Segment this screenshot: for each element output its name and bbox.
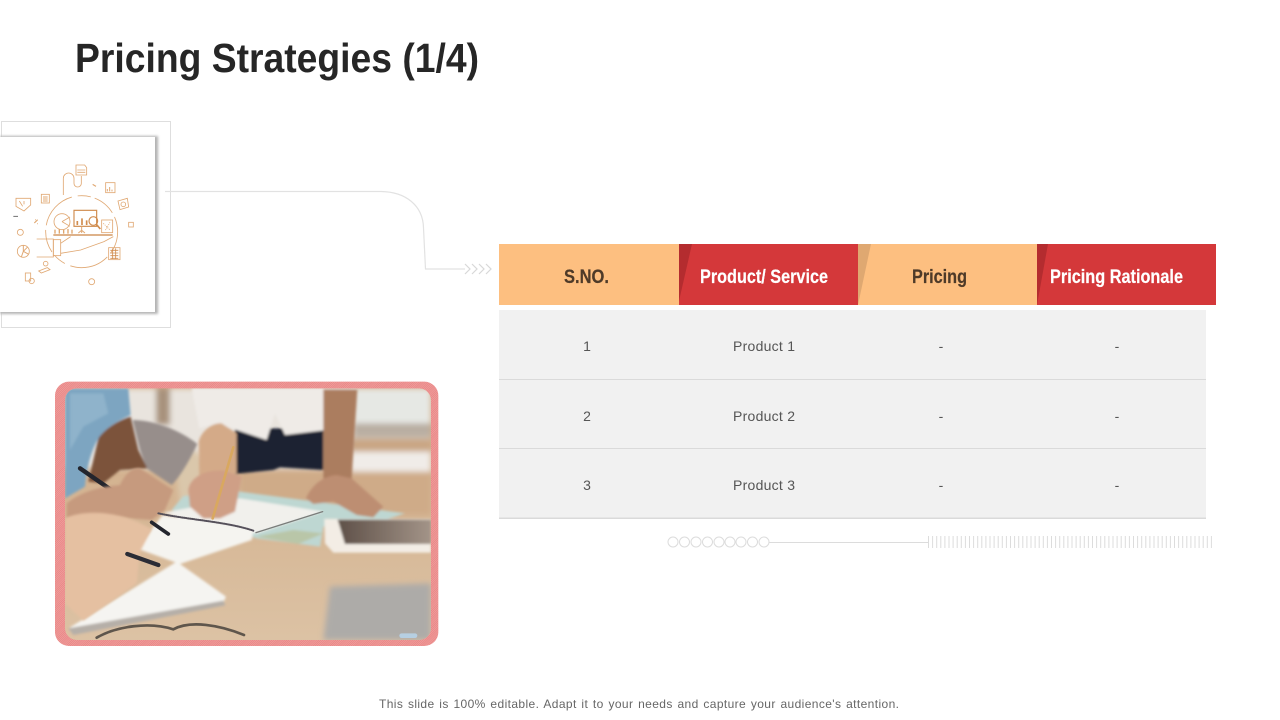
chair xyxy=(133,420,197,485)
row 1: - xyxy=(1115,338,1120,354)
row 3: - xyxy=(1115,477,1120,493)
right hand xyxy=(306,475,383,517)
header: S.NO. xyxy=(499,244,679,305)
card outer frame xyxy=(2,122,170,328)
blue shirt xyxy=(65,388,131,498)
chevrons xyxy=(465,264,491,274)
row 2 xyxy=(499,380,1206,449)
card face xyxy=(0,137,155,312)
row 1: 1 xyxy=(583,338,591,354)
glasses xyxy=(97,624,244,638)
writing hand xyxy=(67,468,173,520)
row 1: Product 1 xyxy=(733,338,795,354)
pen left xyxy=(78,466,112,489)
row 1: - xyxy=(939,338,944,354)
icon card xyxy=(0,122,170,328)
pencil xyxy=(213,447,233,518)
row 2: - xyxy=(939,408,944,424)
row 1 xyxy=(499,310,1206,380)
header: Product/ Service: Product/ Service xyxy=(700,267,828,288)
foreground notebook xyxy=(70,562,226,633)
photo scene xyxy=(65,388,431,640)
header: Product/ Service xyxy=(679,244,858,305)
icon: pricing strategy line art xyxy=(13,165,133,285)
foreground hand xyxy=(65,513,152,621)
table header xyxy=(499,244,1216,305)
green folder xyxy=(257,530,323,544)
centre arm xyxy=(199,423,237,477)
row 3 xyxy=(499,449,1206,519)
header: Pricing Rationale: Pricing Rationale xyxy=(1050,267,1183,288)
right arm xyxy=(323,389,357,478)
row 3: Product 3 xyxy=(733,477,795,493)
header: Pricing: Pricing xyxy=(912,267,967,288)
connector arrow xyxy=(165,192,491,274)
centre hand xyxy=(188,471,242,518)
header: Pricing xyxy=(858,244,1037,305)
row 2: - xyxy=(1115,408,1120,424)
title: Pricing Strategies (1/4) xyxy=(75,35,479,81)
dark arm xyxy=(88,417,147,483)
photo frame xyxy=(55,382,438,646)
row 2: Product 2 xyxy=(733,408,795,424)
centre notebook xyxy=(137,515,253,564)
header: S.NO.: S.NO. xyxy=(564,267,609,288)
card shadow xyxy=(0,136,158,314)
pants xyxy=(235,428,323,474)
row 2: 2 xyxy=(583,408,591,424)
row 3: 3 xyxy=(583,477,591,493)
photo: team working at a table xyxy=(55,382,438,646)
header: Pricing Rationale xyxy=(1037,244,1216,305)
white shirt xyxy=(192,388,357,440)
table body xyxy=(499,310,1206,519)
footer note: This slide is 100% editable. Adapt it to your needs and capture your audience's attention. xyxy=(379,697,899,711)
tablet xyxy=(324,519,431,553)
row 3: - xyxy=(939,477,944,493)
decorative timeline: circles, line and ticks xyxy=(668,536,1211,548)
upper notebook page xyxy=(163,498,323,533)
teal paper xyxy=(172,492,405,547)
